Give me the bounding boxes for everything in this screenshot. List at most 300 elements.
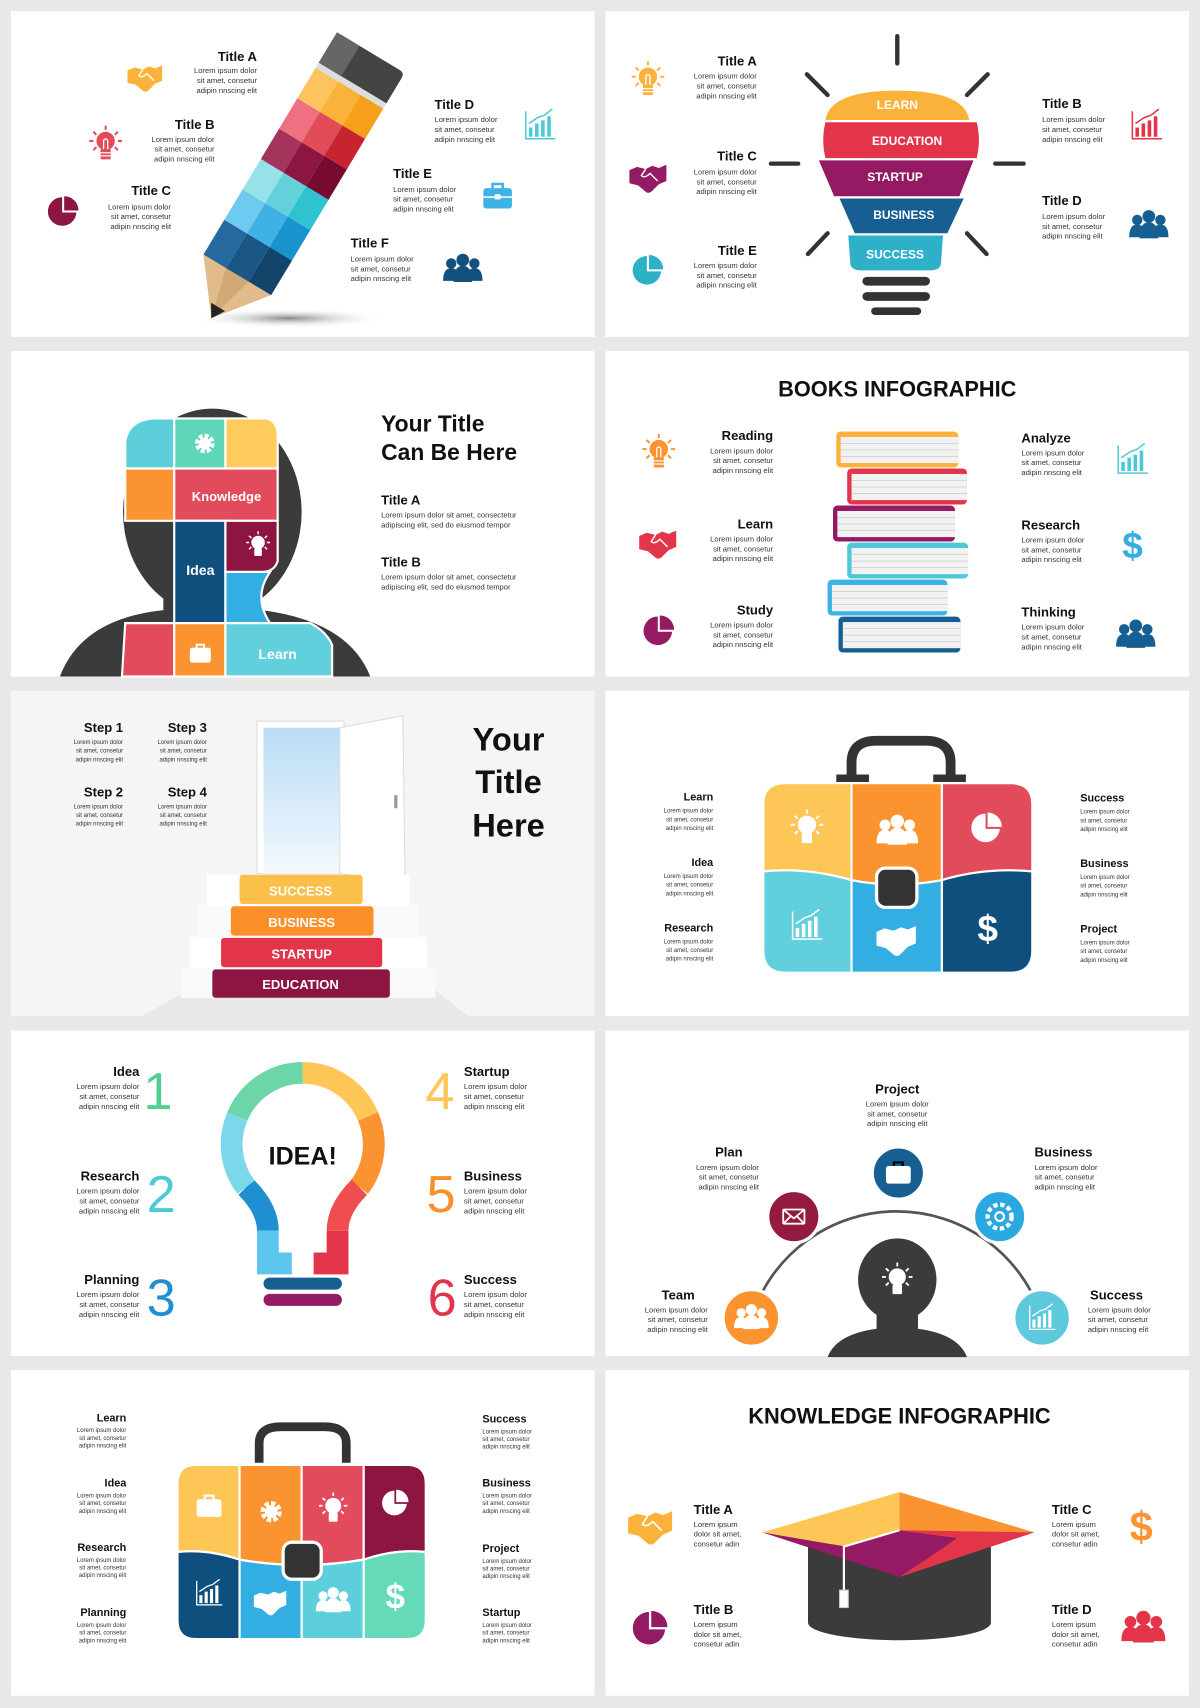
text: Thinking — [1021, 605, 1085, 651]
text: Thinking: Lorem ipsum dolor — [1021, 623, 1085, 632]
text: Team: Lorem ipsum dolor — [645, 1305, 708, 1314]
right texts: adipin nnscing elit — [482, 1445, 530, 1451]
node: Success — [1014, 1290, 1070, 1346]
text: Learn: adipin nnscing elit — [713, 554, 774, 563]
right texts: sit amet, consetur — [464, 1197, 524, 1206]
left texts: sit amet, consetur — [666, 948, 713, 954]
title — [472, 721, 545, 844]
text: Title C: adipin nnscing elit — [696, 187, 758, 196]
icon: handshake — [629, 165, 666, 193]
text: Study: adipin nnscing elit — [713, 640, 774, 649]
text: steps — [74, 720, 208, 828]
right texts: sit amet, consetur — [1080, 818, 1127, 824]
text: Thinking: Thinking — [1021, 605, 1076, 620]
text: Title D: sit amet, consetur — [1042, 222, 1103, 231]
title: Here — [472, 807, 545, 844]
text: Team: sit amet, consetur — [648, 1315, 708, 1324]
text: Title E: sit amet, consetur — [393, 195, 454, 204]
text: steps: Lorem ipsum dolor — [157, 804, 207, 810]
left texts: sit amet, consetur — [79, 1565, 126, 1571]
left texts: Lorem ipsum dolor — [77, 1494, 126, 1500]
text: Title B: sit amet, consetur — [1042, 125, 1103, 134]
text: Title C: sit amet, consetur — [111, 212, 171, 221]
text: Analyze: adipin nnscing elit — [1021, 468, 1083, 477]
band: EDUCATION: EDUCATION — [872, 134, 942, 148]
text: Success — [1088, 1287, 1151, 1334]
node: Plan — [768, 1190, 820, 1243]
left texts: Research — [664, 922, 713, 934]
text: Title C: Lorem ipsum dolor — [108, 202, 171, 211]
text: Title D: consetur adin — [1052, 1640, 1098, 1649]
right texts: Lorem ipsum dolor — [464, 1187, 527, 1196]
node: Business — [974, 1190, 1026, 1243]
text: Title A: consetur adin — [694, 1540, 739, 1549]
text: Title A: Title A — [381, 492, 421, 507]
title: KNOWLEDGE INFOGRAPHIC — [748, 1404, 1051, 1429]
stairs — [181, 875, 436, 998]
right texts: adipin nnscing elit — [1080, 827, 1128, 833]
bulb outline — [232, 1073, 374, 1263]
puzzle labels — [186, 489, 297, 662]
right texts: sit amet, consetur — [482, 1567, 530, 1573]
text: Title A: dolor sit amet, — [694, 1530, 741, 1539]
text: Title C: consetur adin — [1052, 1540, 1098, 1549]
band: SUCCESS: SUCCESS — [866, 247, 924, 261]
text: Title D: Title D — [1042, 193, 1082, 208]
left texts: sit amet, consetur — [79, 1631, 126, 1637]
text: Research: adipin nnscing elit — [1021, 555, 1083, 564]
text: steps: Step 1 — [84, 720, 123, 735]
text: Title F: Title F — [351, 235, 389, 250]
text: Title B: sit amet, consetur — [154, 145, 215, 154]
icon: bulb — [89, 126, 122, 159]
text: Title B: adipin nnscing elit — [1042, 135, 1103, 144]
right texts: Success — [464, 1272, 517, 1287]
text: Title D: Lorem ipsum — [1052, 1620, 1096, 1629]
text: Title B — [1042, 96, 1106, 144]
text: Title B: Title B — [175, 117, 215, 132]
right texts: Success — [482, 1413, 527, 1425]
text: Title B: Title B — [1042, 96, 1082, 111]
text: Title A: Title A — [694, 1502, 733, 1517]
right texts: adipin nnscing elit — [464, 1102, 525, 1111]
icon: pie — [633, 255, 663, 285]
pencil — [177, 32, 405, 339]
text: Analyze — [1021, 430, 1085, 477]
right texts: sit amet, consetur — [1080, 949, 1127, 955]
text: Title F: adipin nnscing elit — [351, 274, 412, 283]
text: Reading: Reading — [722, 428, 773, 443]
text: Reading: adipin nnscing elit — [713, 466, 774, 475]
text: Title B: Lorem ipsum — [694, 1620, 738, 1629]
icon: handshake — [127, 65, 162, 92]
text: Title B: Lorem ipsum dolor — [1042, 115, 1106, 124]
title: Your — [473, 721, 545, 758]
text: steps: Step 2 — [84, 784, 123, 799]
text: Project: Lorem ipsum dolor — [866, 1100, 929, 1109]
left texts: Planning — [80, 1607, 126, 1619]
text: Title A: adipiscing elit, sed do eiusmod tempor — [381, 520, 511, 529]
text: Thinking: adipin nnscing elit — [1021, 642, 1083, 651]
rays — [771, 36, 1024, 254]
left texts: adipin nnscing elit — [79, 1102, 140, 1111]
right texts: Success — [1080, 793, 1124, 805]
left texts: sit amet, consetur — [79, 1436, 126, 1442]
icon: dollar: $ — [1122, 524, 1143, 566]
text: steps: adipin nnscing elit — [159, 757, 207, 763]
numbers: 5 — [426, 1166, 456, 1224]
text: Title E: Title E — [393, 166, 432, 181]
text: Business: Lorem ipsum dolor — [1034, 1163, 1098, 1172]
text: Title A: Title A — [718, 54, 757, 69]
text: Title A: Lorem ipsum dolor — [194, 66, 257, 75]
right texts: Business — [482, 1478, 531, 1490]
text: Title F: Lorem ipsum dolor — [351, 255, 414, 264]
text: Title A: Lorem ipsum dolor sit amet, consectetur — [381, 511, 517, 520]
puzzle labels: Knowledge — [192, 489, 261, 504]
numbers: 4 — [425, 1063, 454, 1121]
tiles — [177, 1465, 426, 1639]
text: Study: sit amet, consetur — [713, 630, 774, 639]
icon: chart — [1118, 443, 1148, 473]
text: Title C: Lorem ipsum dolor — [694, 168, 757, 177]
left texts: Lorem ipsum dolor — [664, 939, 713, 945]
right texts: Startup — [482, 1607, 521, 1619]
handle — [836, 741, 966, 782]
left texts: Lorem ipsum dolor — [76, 1290, 140, 1299]
left texts: Learn — [684, 792, 713, 804]
text: steps: sit amet, consetur — [160, 813, 207, 819]
text: Title D — [1052, 1602, 1100, 1649]
text: steps: Lorem ipsum dolor — [74, 740, 123, 746]
left texts: sit amet, consetur — [79, 1501, 126, 1507]
text: Title C: Title C — [1052, 1502, 1092, 1517]
numbers: 6 — [428, 1270, 457, 1328]
text: Title C: Title C — [131, 183, 172, 198]
text: Project: sit amet, consetur — [867, 1109, 928, 1118]
text: Title C — [694, 148, 758, 196]
text: Business — [1034, 1145, 1098, 1191]
band: SUCCESS — [848, 235, 943, 270]
dollar icon: $ — [386, 1578, 405, 1617]
text: Title C: adipin nnscing elit — [110, 222, 172, 231]
left texts: adipin nnscing elit — [79, 1509, 127, 1515]
left texts: sit amet, consetur — [666, 883, 713, 889]
right texts: sit amet, consetur — [464, 1092, 524, 1101]
left texts: adipin nnscing elit — [79, 1206, 140, 1215]
text: steps: adipin nnscing elit — [159, 822, 207, 828]
bulb base — [264, 1278, 342, 1306]
text: Plan: adipin nnscing elit — [698, 1182, 760, 1191]
text: Title D: sit amet, consetur — [434, 125, 495, 134]
text: Title A — [694, 54, 758, 100]
left texts — [77, 1412, 127, 1644]
text: Title B: Lorem ipsum dolor sit amet, consectetur — [381, 573, 517, 582]
text: Title E: adipin nnscing elit — [696, 281, 758, 290]
text: Analyze: sit amet, consetur — [1021, 458, 1082, 467]
left texts: sit amet, consetur — [79, 1197, 140, 1206]
left texts: Lorem ipsum dolor — [77, 1623, 126, 1629]
icon: pie — [644, 615, 674, 645]
icon: people — [1121, 1611, 1165, 1642]
door — [257, 716, 405, 882]
puzzle icons — [190, 436, 270, 663]
panel: IDEA bulb numbered — [11, 1030, 595, 1356]
text: Title D — [434, 97, 498, 144]
text: Title E: Title E — [718, 243, 757, 258]
icon: handshake — [628, 1511, 672, 1545]
text: Title D: Lorem ipsum dolor — [1042, 212, 1106, 221]
text: Title C: Title C — [717, 148, 757, 163]
right texts — [1080, 793, 1130, 964]
IDEA label: IDEA! — [269, 1142, 337, 1170]
text: Success: sit amet, consetur — [1088, 1315, 1148, 1324]
text: steps: Step 3 — [168, 720, 207, 735]
text: Analyze: Analyze — [1021, 430, 1071, 445]
title: BOOKS INFOGRAPHIC — [778, 377, 1017, 402]
text: Title B — [381, 555, 517, 591]
right texts: Lorem ipsum dolor — [482, 1494, 532, 1500]
icon: people — [1129, 210, 1168, 238]
stairs: EDUCATION — [262, 977, 339, 992]
text: steps: sit amet, consetur — [160, 749, 207, 755]
left texts: Lorem ipsum dolor — [76, 1187, 140, 1196]
right texts: Lorem ipsum dolor — [1080, 875, 1130, 881]
text: Title E: Lorem ipsum dolor — [694, 261, 757, 270]
text: Thinking: sit amet, consetur — [1021, 632, 1082, 641]
text: Analyze: Lorem ipsum dolor — [1021, 448, 1085, 457]
text: Success: Lorem ipsum dolor — [1088, 1305, 1151, 1314]
text: Title B: adipin nnscing elit — [154, 154, 215, 163]
title: Your Title — [381, 410, 484, 436]
text: Title A: sit amet, consetur — [697, 81, 757, 90]
text: Title B: Title B — [694, 1602, 733, 1617]
right texts: adipin nnscing elit — [464, 1310, 525, 1319]
text: Study: Lorem ipsum dolor — [710, 621, 774, 630]
text: Title B — [152, 117, 215, 163]
text: Title E: Lorem ipsum dolor — [393, 185, 457, 194]
left texts: Idea — [105, 1478, 127, 1490]
text: Title B — [694, 1602, 741, 1649]
left texts: sit amet, consetur — [79, 1300, 140, 1309]
icon: bulb — [632, 61, 664, 95]
icon: pie — [633, 1611, 667, 1644]
left texts: adipin nnscing elit — [79, 1443, 127, 1449]
right texts: sit amet, consetur — [482, 1437, 530, 1443]
right texts: adipin nnscing elit — [482, 1509, 530, 1515]
icon: pie — [48, 196, 78, 226]
left texts: adipin nnscing elit — [79, 1573, 127, 1579]
text: Title D: Title D — [1052, 1602, 1092, 1617]
text: Title C: Lorem ipsum — [1052, 1520, 1096, 1529]
text: Title C — [1052, 1502, 1100, 1549]
title: Can Be Here — [381, 439, 517, 465]
text: steps: adipin nnscing elit — [76, 757, 123, 763]
text: Project: adipin nnscing elit — [867, 1119, 928, 1128]
panel: door and stairs — [11, 691, 595, 1016]
icon: chart — [1132, 109, 1162, 139]
text: Title C: dolor sit amet, — [1052, 1530, 1100, 1539]
text: Research: Lorem ipsum dolor — [1021, 536, 1085, 545]
text: Title D: dolor sit amet, — [1052, 1630, 1100, 1639]
right texts: Startup — [464, 1064, 510, 1079]
head bulb icon — [882, 1263, 913, 1294]
text: Title A — [381, 492, 517, 529]
panel: books — [605, 351, 1189, 677]
stairs: SUCCESS — [269, 883, 332, 898]
text: Team: adipin nnscing elit — [647, 1325, 709, 1334]
panel: arc of circles — [605, 1030, 1189, 1357]
icons — [197, 1490, 409, 1615]
text: Learn: sit amet, consetur — [713, 544, 774, 553]
text: Title A: Title A — [218, 49, 258, 64]
right texts: sit amet, consetur — [1080, 884, 1127, 890]
stairs: BUSINESS — [268, 915, 335, 930]
left texts — [76, 1064, 140, 1319]
text: Learn: Lorem ipsum dolor — [710, 534, 774, 543]
left texts: adipin nnscing elit — [666, 826, 714, 832]
panel: lightbulb stack — [605, 11, 1189, 337]
left texts: sit amet, consetur — [79, 1092, 140, 1101]
right texts: Project — [482, 1543, 520, 1555]
right texts: adipin nnscing elit — [1080, 892, 1128, 898]
text: Reading: Lorem ipsum dolor — [710, 446, 774, 455]
text: steps: Lorem ipsum dolor — [74, 804, 123, 810]
left texts — [664, 792, 714, 963]
text: Title A: sit amet, consetur — [197, 76, 257, 85]
text: Success: Success — [1090, 1287, 1143, 1302]
text: Team: Team — [662, 1287, 695, 1302]
puzzle labels: Idea — [186, 562, 215, 578]
band: BUSINESS — [840, 198, 964, 233]
icon: people — [1116, 620, 1155, 648]
band: LEARN — [825, 91, 969, 120]
left texts: Lorem ipsum dolor — [77, 1428, 126, 1434]
pencil shadow — [191, 308, 387, 328]
puzzle labels: Learn — [258, 646, 297, 662]
text: Research: Research — [1021, 517, 1080, 532]
text: Title F — [351, 235, 414, 283]
text: Title D: adipin nnscing elit — [1042, 232, 1103, 241]
text: Title E — [694, 243, 758, 290]
left texts: Lorem ipsum dolor — [76, 1082, 140, 1091]
text: Title E — [393, 166, 457, 214]
left texts: Planning — [84, 1272, 139, 1287]
title — [381, 410, 517, 465]
text: Title A — [194, 49, 258, 95]
arc — [751, 1211, 1042, 1318]
right texts: Project — [1080, 923, 1117, 935]
panel: briefcase 8 tiles — [11, 1370, 595, 1696]
text: steps: Step 4 — [168, 784, 208, 799]
left texts: Lorem ipsum dolor — [664, 874, 713, 880]
numbers: 3 — [147, 1270, 176, 1328]
text: Plan: Lorem ipsum dolor — [696, 1163, 759, 1172]
text: Title D: Title D — [434, 97, 474, 112]
panel: briefcase 6 tiles — [605, 691, 1189, 1016]
text: Reading — [710, 428, 774, 475]
text: Title D: Lorem ipsum dolor — [434, 115, 498, 124]
numbers — [143, 1063, 457, 1328]
text: Title F: sit amet, consetur — [351, 264, 411, 273]
text: Title C — [108, 183, 172, 231]
left texts: adipin nnscing elit — [79, 1638, 127, 1644]
band: EDUCATION — [823, 122, 979, 158]
right texts: adipin nnscing elit — [482, 1574, 530, 1580]
text: Title D: adipin nnscing elit — [434, 135, 496, 144]
text: Title A: Lorem ipsum dolor — [694, 72, 757, 81]
text: Project: Project — [875, 1082, 920, 1097]
clasp — [877, 868, 917, 907]
text: Study: Study — [737, 602, 774, 617]
text: Title C: sit amet, consetur — [697, 177, 757, 186]
text: Plan: sit amet, consetur — [699, 1173, 759, 1182]
bulb base — [862, 277, 930, 315]
right texts: Lorem ipsum dolor — [1080, 810, 1130, 816]
icon: dollar: $ — [1130, 1504, 1153, 1550]
node: Team — [723, 1290, 780, 1346]
text: Business: Business — [1034, 1145, 1092, 1160]
text: Reading: sit amet, consetur — [713, 456, 774, 465]
left texts: Idea — [691, 857, 714, 869]
text: Title A — [694, 1502, 741, 1549]
icon: handshake — [639, 531, 676, 559]
left texts: Lorem ipsum dolor — [77, 1558, 126, 1564]
text: steps: sit amet, consetur — [76, 749, 123, 755]
text: Title B: Title B — [381, 555, 421, 570]
right texts: Business — [464, 1169, 522, 1184]
puzzle pieces — [122, 418, 332, 677]
right texts: Business — [1080, 858, 1129, 870]
books stack — [828, 431, 968, 653]
right texts — [482, 1413, 532, 1644]
icon: people — [443, 254, 482, 282]
stairs: STARTUP — [271, 947, 332, 962]
left texts: adipin nnscing elit — [666, 957, 714, 963]
band: BUSINESS: BUSINESS — [873, 208, 934, 222]
handle — [259, 1427, 346, 1463]
text: Study — [710, 602, 774, 649]
icon: bulb — [642, 434, 675, 467]
left texts: adipin nnscing elit — [79, 1310, 140, 1319]
band: LEARN: LEARN — [877, 98, 918, 112]
text: Title A: adipin nnscing elit — [696, 91, 758, 100]
text: steps: Lorem ipsum dolor — [157, 740, 207, 746]
numbers: 1 — [143, 1063, 172, 1121]
left texts: sit amet, consetur — [666, 817, 713, 823]
text: Team — [645, 1287, 709, 1334]
floor — [142, 986, 468, 1016]
icon: chart — [526, 109, 555, 139]
briefcase tiles — [763, 783, 1032, 973]
head silhouette — [828, 1238, 967, 1357]
right texts: Lorem ipsum dolor — [482, 1559, 532, 1565]
text: Title E: sit amet, consetur — [697, 271, 757, 280]
text: Learn — [710, 516, 774, 563]
clasp — [283, 1542, 321, 1579]
right texts: adipin nnscing elit — [464, 1206, 525, 1215]
left texts: Learn — [97, 1412, 126, 1424]
head silhouette — [60, 409, 370, 677]
tassel — [840, 1530, 899, 1608]
right texts: Lorem ipsum dolor — [1080, 940, 1130, 946]
left texts: Research — [77, 1542, 126, 1554]
text: Learn: Learn — [738, 516, 773, 531]
text: Title B: dolor sit amet, — [694, 1630, 741, 1639]
text: Title E: adipin nnscing elit — [393, 205, 454, 214]
right texts: sit amet, consetur — [482, 1631, 530, 1637]
left texts: adipin nnscing elit — [666, 891, 714, 897]
